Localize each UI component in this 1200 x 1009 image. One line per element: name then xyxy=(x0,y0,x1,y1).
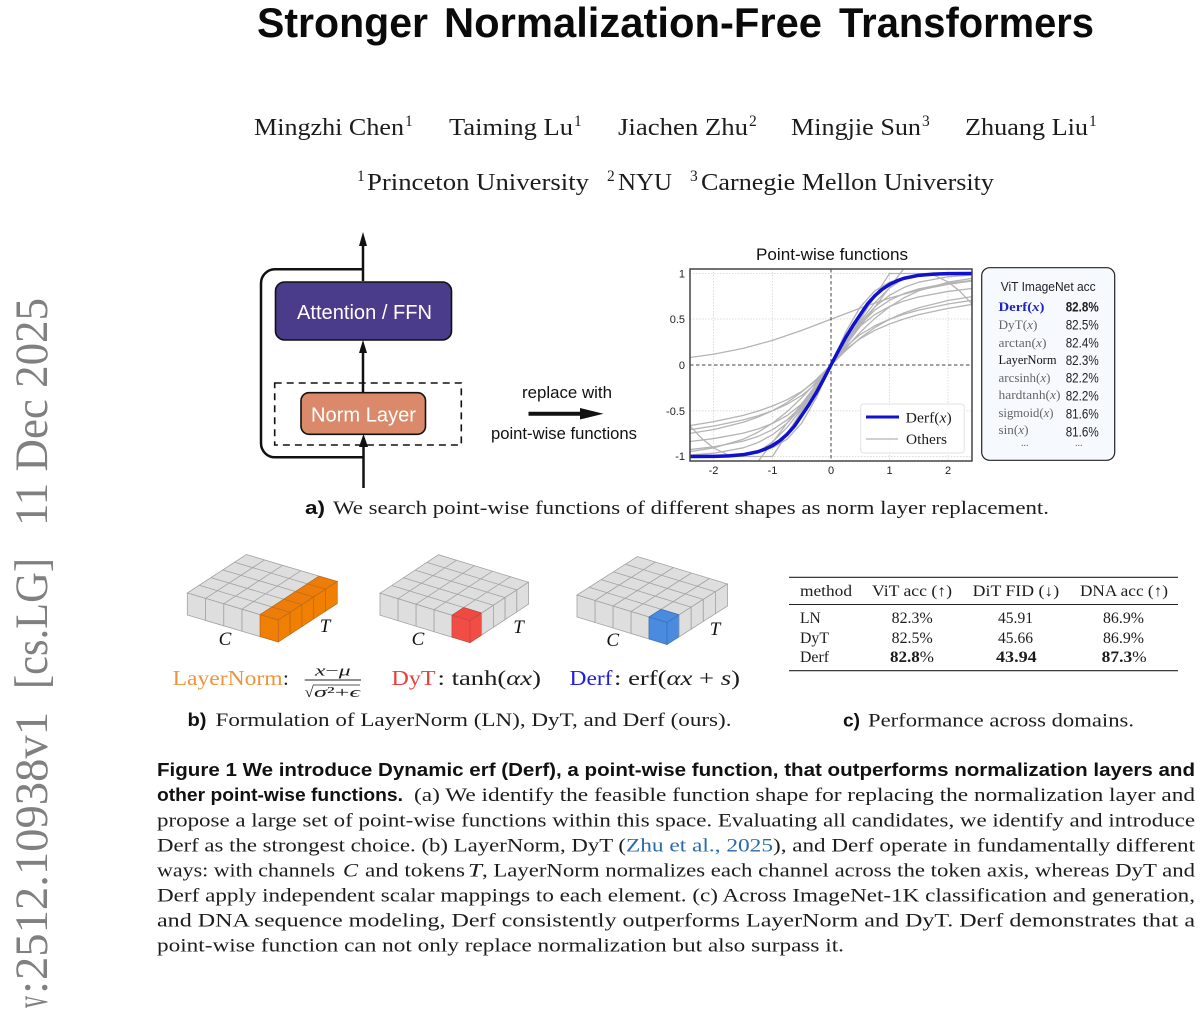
authors: 1 xyxy=(574,113,582,130)
other functions xyxy=(690,264,972,466)
row: Derf: 82.8% xyxy=(890,649,934,666)
arXiv side stamp xyxy=(6,298,58,1008)
chart: point-wise functions xyxy=(666,245,972,477)
affiliations: Carnegie Mellon University xyxy=(701,170,994,196)
title: Transformers xyxy=(839,0,1094,46)
accuracy rows xyxy=(998,299,1099,449)
caption a: We search point-wise functions of different shapes as norm layer replacement. xyxy=(333,498,1049,519)
authors: Taiming Lu xyxy=(449,115,573,141)
figure description paragraph: (a) We identify the feasible function shape for replacing the normalization layer and xyxy=(414,785,1196,806)
affiliations: NYU xyxy=(618,170,672,196)
table header: method xyxy=(800,583,852,600)
block: DyT tensor xyxy=(380,555,528,650)
arrow: input xyxy=(359,434,368,488)
accuracy rows: DyT(x) xyxy=(998,317,1038,332)
authors: 1 xyxy=(1089,113,1097,130)
plot frame xyxy=(690,269,972,461)
authors: Jiachen Zhu xyxy=(618,115,748,141)
y axis labels: -0.5 xyxy=(666,406,685,418)
y axis labels: -1 xyxy=(675,451,685,463)
accuracy rows: ... xyxy=(1075,438,1082,449)
figure description paragraph: C xyxy=(343,860,359,882)
panel title: ViT ImageNet acc xyxy=(1001,279,1096,294)
attention block xyxy=(276,282,452,340)
figure description paragraph: point-wise function can not only replace normalization but also surpass it. xyxy=(157,936,844,956)
accuracy rows: arctan(x) xyxy=(998,335,1046,350)
x axis labels: 0 xyxy=(828,465,834,477)
accuracy rows: ... xyxy=(1021,438,1028,449)
accuracy rows: 81.6% xyxy=(1066,424,1099,440)
figure description paragraph: Zhu et al., 2025 xyxy=(626,836,773,856)
formula: Derf: Derf xyxy=(570,666,612,690)
accuracy rows: 82.5% xyxy=(1066,318,1099,332)
row: DyT: 82.5% xyxy=(892,630,933,647)
block: Derf tensor: C xyxy=(606,630,619,651)
caption b: Formulation of LayerNorm (LN), DyT, and Derf (ours). xyxy=(216,710,732,731)
figure description paragraph: and DNA sequence modeling, Derf consistently outperforms LayerNorm and DyT. Derf demonstrates that a xyxy=(157,910,1196,932)
figure description paragraph: ), and Derf operate in fundamentally different xyxy=(773,836,1196,856)
norm layer block xyxy=(301,393,426,434)
authors: Zhuang Liu xyxy=(965,115,1088,141)
block: DyT tensor: T xyxy=(513,617,525,638)
title: Normalization-Free xyxy=(444,0,822,46)
legend xyxy=(861,404,964,453)
table: performance across domains xyxy=(789,577,1178,671)
authors: 2 xyxy=(749,113,757,130)
figure description paragraph: , LayerNorm normalizes each channel across the token axis, whereas DyT and xyxy=(482,860,1196,882)
affiliations: 2 xyxy=(607,168,615,185)
accuracy rows: LayerNorm xyxy=(998,352,1056,367)
row: LN: LN xyxy=(800,610,821,627)
row: DyT: 45.66 xyxy=(998,630,1033,647)
attention block: Attention / FFN xyxy=(297,302,432,324)
title xyxy=(257,0,1094,46)
figure description paragraph: and tokens xyxy=(365,860,465,882)
function curves xyxy=(690,264,972,466)
formula: LayerNorm: x − μ xyxy=(313,664,351,680)
caption c: Performance across domains. xyxy=(868,710,1134,732)
formula: DyT: DyT xyxy=(392,666,436,690)
formula: LayerNorm: σ ²+ ϵ xyxy=(314,685,362,701)
Derf curve xyxy=(690,274,972,456)
table header: DiT FID (↓) xyxy=(973,583,1059,600)
affiliations xyxy=(357,168,994,196)
table header xyxy=(800,583,1168,600)
accuracy rows: 82.2% xyxy=(1066,370,1099,386)
row: Derf: 87.3% xyxy=(1102,649,1147,666)
row: DyT: DyT xyxy=(800,630,830,647)
authors: 1 xyxy=(405,113,413,130)
block: Derf tensor xyxy=(577,556,728,651)
dashed replacement box xyxy=(275,383,461,445)
figure description paragraph: Derf as the strongest choice. (b) LayerNorm, DyT ( xyxy=(157,836,626,856)
y axis labels: 0.5 xyxy=(670,314,685,326)
chart title: Point-wise functions xyxy=(756,245,908,264)
panel: ViT ImageNet accuracy xyxy=(982,268,1115,460)
authors: 3 xyxy=(922,113,930,130)
formula: LayerNorm: LayerNorm xyxy=(173,666,283,690)
arXiv side stamp: : xyxy=(6,981,58,994)
x axis labels: -1 xyxy=(768,465,777,477)
block: LayerNorm tensor: T xyxy=(320,616,332,637)
accuracy rows: 82.2% xyxy=(1066,388,1099,404)
replace with arrow and labels: replace with xyxy=(522,383,612,402)
block: Derf tensor: T xyxy=(710,619,722,640)
figure description paragraph xyxy=(157,760,1196,956)
block: DyT tensor: C xyxy=(412,629,425,650)
accuracy rows: 82.8% xyxy=(1066,300,1099,314)
affiliations: 3 xyxy=(690,168,698,185)
table header: ViT acc (↑) xyxy=(872,583,952,600)
affiliations: Princeton University xyxy=(367,170,589,196)
row: DyT xyxy=(800,630,1144,647)
row: Derf: 43.94 xyxy=(996,649,1037,666)
accuracy rows: sigmoid(x) xyxy=(998,405,1054,420)
accuracy rows: sin(x) xyxy=(998,422,1028,437)
legend: Others xyxy=(906,432,947,448)
formula: LayerNorm: √ xyxy=(305,685,315,701)
arXiv side stamp: 11 Dec 2025 xyxy=(6,298,58,526)
title: Stronger xyxy=(257,0,428,46)
authors: Mingjie Sun xyxy=(791,115,921,141)
x axis labels: -2 xyxy=(709,465,718,477)
x axis labels xyxy=(709,465,951,477)
grid xyxy=(690,269,972,461)
formula: DyT xyxy=(392,666,541,690)
skip connection xyxy=(261,269,363,457)
caption b: b) xyxy=(188,710,206,730)
arXiv side stamp: [cs.LG] xyxy=(6,558,58,689)
formula: Derf: : erf( αx + s) xyxy=(614,666,740,690)
formula: DyT: : tanh( αx ) xyxy=(438,666,541,690)
figure description paragraph: Derf apply independent scalar mappings to each element. (c) Across ImageNet-1K classification and generation, xyxy=(157,886,1195,906)
zero axes xyxy=(690,269,972,461)
figure description paragraph: propose a large set of point-wise functions within this space. Evaluating all candidates, we identify and introduce xyxy=(157,810,1195,832)
legend: Derf(x) xyxy=(906,410,952,426)
table header: DNA acc (↑) xyxy=(1080,583,1168,600)
x axis labels: 2 xyxy=(945,465,951,477)
accuracy rows: 82.3% xyxy=(1066,353,1099,368)
accuracy rows: hardtanh(x) xyxy=(998,387,1060,402)
block: LayerNorm tensor xyxy=(187,554,337,650)
affiliations: 1 xyxy=(357,168,365,185)
diagram: transformer block with norm layer xyxy=(261,232,461,488)
figure description paragraph: Figure 1 We introduce Dynamic erf (Derf), a point-wise function, that outperforms normalization layers and xyxy=(157,760,1195,780)
row: LN xyxy=(800,610,1144,627)
caption a: a) xyxy=(305,498,325,518)
figure description paragraph: ways: with channels xyxy=(157,860,335,882)
formula: LayerNorm xyxy=(173,664,362,701)
accuracy rows: 81.6% xyxy=(1066,406,1099,422)
row: LN: 45.91 xyxy=(998,610,1033,627)
arrow: norm to attention xyxy=(359,340,367,392)
y axis labels: 0 xyxy=(679,360,685,372)
row: LN: 86.9% xyxy=(1103,610,1144,627)
norm layer block: Norm Layer xyxy=(311,404,416,426)
figure description paragraph: other point-wise functions. xyxy=(157,785,403,805)
x axis labels: 1 xyxy=(886,465,893,477)
formula: LayerNorm: : xyxy=(283,666,289,690)
y axis labels xyxy=(666,268,685,463)
accuracy rows: Derf( x) xyxy=(998,299,1044,314)
y axis labels: 1 xyxy=(679,268,685,280)
arXiv side stamp: 2512.10938v1 xyxy=(6,712,58,980)
authors xyxy=(254,113,1097,141)
arXiv side stamp: v xyxy=(6,996,58,1008)
accuracy rows: arcsinh(x) xyxy=(998,370,1050,385)
row: LN: 82.3% xyxy=(892,610,933,627)
block: LayerNorm tensor: C xyxy=(219,629,232,650)
row: Derf: Derf xyxy=(800,649,830,666)
replace with arrow and labels: point-wise functions xyxy=(491,424,637,443)
row: DyT: 86.9% xyxy=(1103,630,1144,647)
authors: Mingzhi Chen xyxy=(254,115,404,141)
accuracy rows: 82.4% xyxy=(1066,336,1099,350)
row: Derf xyxy=(800,649,1147,666)
arrow: output xyxy=(359,232,367,281)
figure description paragraph: T xyxy=(468,860,484,882)
replace with arrow and labels xyxy=(491,383,637,443)
caption c: c) xyxy=(843,710,860,730)
